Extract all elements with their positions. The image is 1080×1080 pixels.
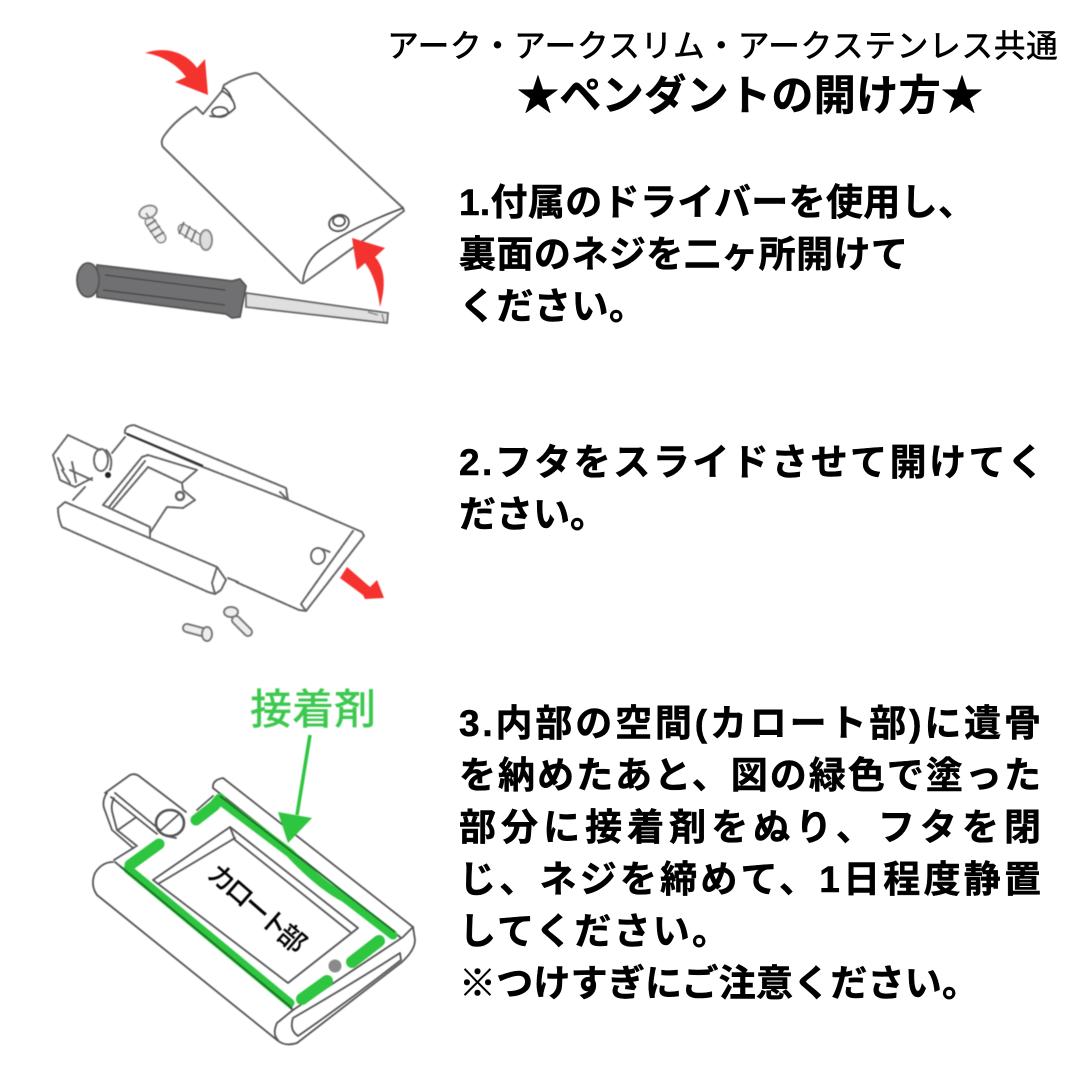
step 1 text: ください。: [459, 286, 646, 327]
step 2 text: 2.フタをスライドさせて開けてく: [459, 442, 1044, 483]
screw hole: [328, 960, 342, 972]
red arrow: top screw: [145, 50, 208, 95]
step 3 text: じ、ネジを締めて、1日程度静置: [459, 859, 1041, 900]
pendant body and sliding cover: [58, 425, 364, 611]
top rail shadow line: [127, 434, 203, 466]
step 2 text: [459, 442, 1044, 535]
step 3 text: ※つけすぎにご注意ください。: [459, 963, 979, 1004]
bail and screw: [103, 774, 186, 848]
step 3 text: 部分に接着剤をぬり、フタを閉: [459, 807, 1041, 848]
step 3 text: を納めたあと、図の緑色で塗った: [459, 755, 1041, 796]
green arrow to adhesive: [278, 735, 312, 843]
step 1 text: 1.付属のドライバーを使用し、: [459, 182, 975, 223]
pendant frame and rails: [93, 778, 415, 1044]
glue edge shadow lines: [120, 796, 395, 1008]
karoto compartment label: カロート部: [202, 858, 312, 959]
step 1 text: 裏面のネジを二ヶ所開けて: [459, 234, 908, 275]
screw 1: [137, 203, 164, 238]
cover curved edge and screw holes: [210, 88, 403, 281]
illustration: step 2 sliding the cover: [53, 425, 384, 641]
title: ★ペンダントの開け方★: [517, 72, 983, 119]
adhesive label: 接着剤: [250, 686, 376, 733]
step 3 text: してください。: [459, 911, 729, 952]
cover plate: [162, 73, 404, 283]
screw 2: [179, 222, 212, 250]
illustration: step 1 unscrewing the cover: [77, 50, 404, 323]
screwdriver: [77, 263, 388, 323]
step 1 text: [459, 182, 975, 327]
green adhesive strips: [128, 799, 393, 1003]
step 2 text: ださい。: [459, 494, 607, 535]
window screw: [176, 492, 184, 500]
pendant bail: [53, 435, 111, 487]
bail screw head: [105, 472, 111, 478]
red arrow: slide direction: [340, 567, 384, 599]
red arrow: bottom screw: [352, 238, 385, 307]
step 3 text: 3.内部の空間(カロート部)に遺骨: [459, 703, 1041, 744]
detached screws: [187, 607, 248, 641]
step 3 text: [459, 703, 1041, 1004]
subtitle: product names: アーク・アークスリム・アークステンレス共通: [387, 28, 1058, 64]
illustration: step 3 applying adhesive: [93, 686, 415, 1044]
